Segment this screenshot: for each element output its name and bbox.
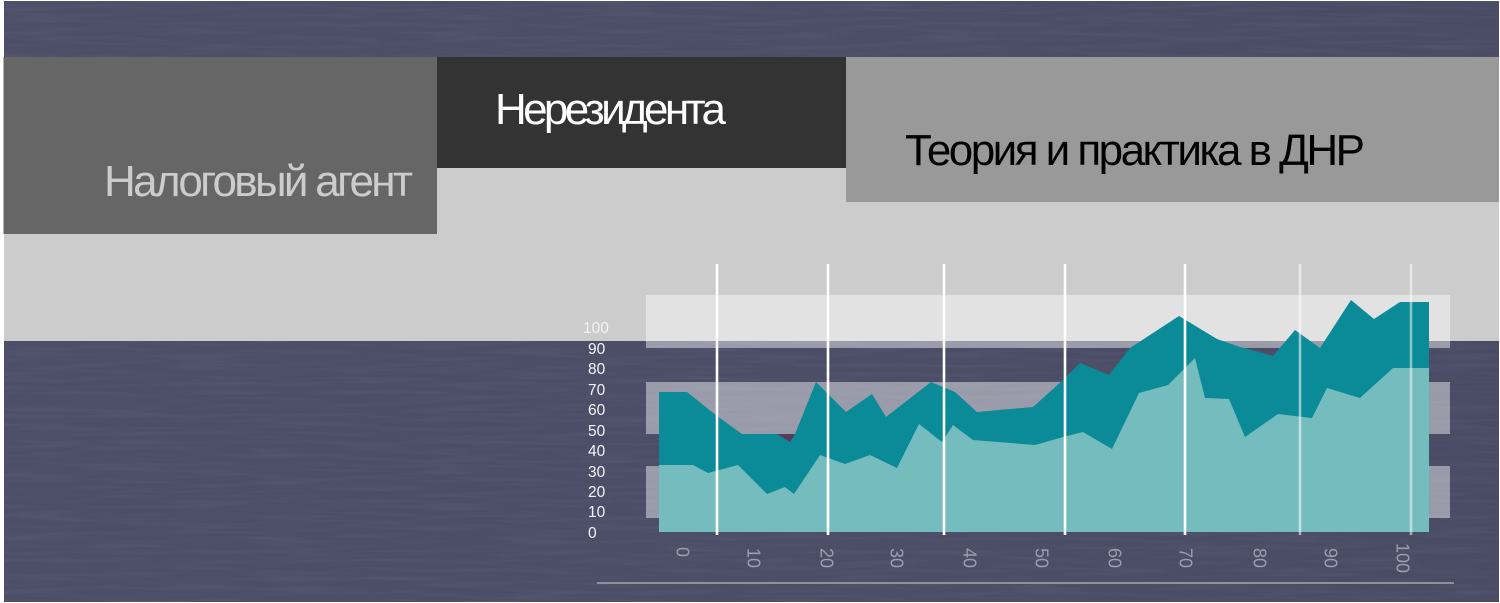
x-axis labels: 40 [960,548,980,568]
y-axis labels: 40 [588,443,606,460]
y-axis labels: 20 [588,484,606,501]
heading: Теория и практика в ДНР: Теория и практика в ДНР [905,126,1365,175]
dark teal area series [659,300,1429,532]
x-axis labels: 10 [744,548,764,568]
y-axis labels: 30 [588,464,606,481]
background band: middle [646,382,1450,434]
vertical marker lines [717,264,1411,535]
x-axis labels: 50 [1032,548,1052,568]
x-axis labels: 60 [1104,548,1124,568]
x-axis labels: 80 [1250,548,1270,568]
light teal area series [659,358,1429,532]
panel: Теория и практика в ДНР [846,57,1499,202]
plum area sliver [770,434,797,444]
y-axis labels: 100 [583,320,609,337]
background band: upper [646,295,1450,348]
y-axis labels: 10 [588,504,606,521]
area chart [583,264,1454,583]
x-axis labels [672,543,1412,573]
y-axis labels: 80 [588,361,606,378]
y-axis labels: 90 [588,341,606,358]
x-axis labels: 20 [816,548,836,568]
x-axis labels: 100 [1392,543,1412,573]
panel: Налоговый агент [4,57,437,234]
y-axis labels: 70 [588,382,606,399]
light grey horizontal band [4,168,1499,341]
x-axis baseline [597,582,1454,584]
y-axis labels: 60 [588,402,606,419]
x-axis labels: 70 [1176,548,1196,568]
x-axis labels: 90 [1320,548,1340,568]
panel: Нерезидента [437,57,846,168]
heading: Налоговый агент: Налоговый агент [104,157,413,206]
y-axis labels [583,320,609,542]
x-axis labels: 0 [672,547,692,557]
x-axis labels: 30 [886,548,906,568]
heading: Нерезидента: Нерезидента [495,85,727,134]
y-axis labels: 50 [588,423,606,440]
background band: lower [646,466,1450,518]
y-axis labels: 0 [588,525,597,542]
